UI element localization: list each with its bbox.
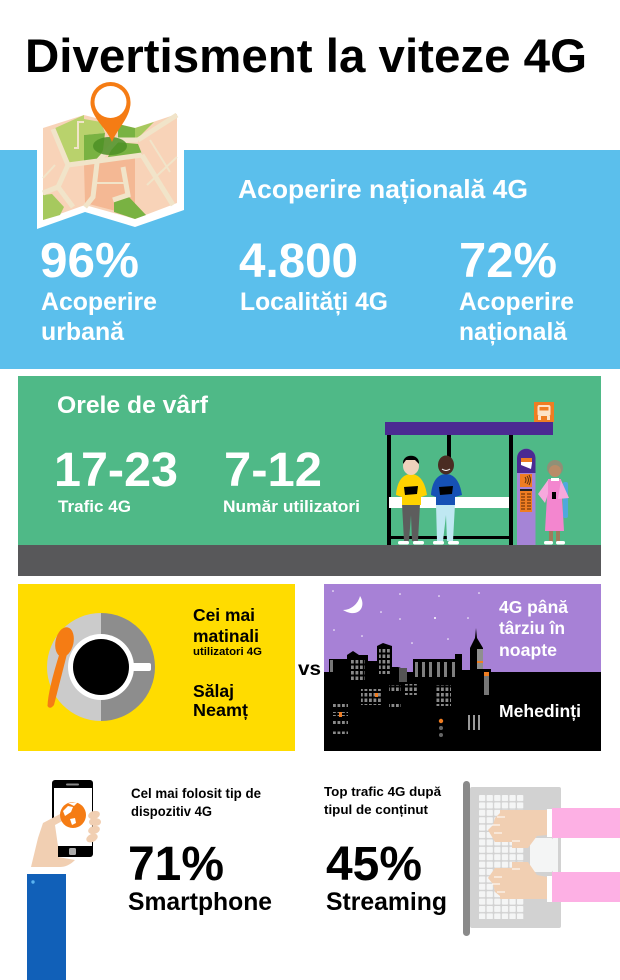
stat: urban coverage: Acoperire: [41, 289, 157, 316]
stat: 4G traffic: Trafic 4G: [58, 497, 131, 516]
stat: 4G localities: Localități 4G: [240, 289, 388, 316]
person: yellow shirt: [396, 456, 427, 544]
heading: Acoperire națională 4G: [238, 174, 528, 204]
stat: 4G localities: [239, 235, 388, 316]
icon: blue sleeve: [27, 874, 66, 980]
text: earliest users: matinali: [193, 626, 259, 646]
icon: moon and stars: [332, 590, 480, 644]
icon: hands on laptop: [463, 781, 620, 936]
stat: national coverage: [459, 234, 574, 346]
stat: 4G traffic: 17-23: [54, 443, 178, 497]
stat: content type: [324, 784, 447, 916]
text: late users: [499, 597, 581, 721]
stat: urban coverage: [40, 234, 157, 346]
text: earliest users: Neamț: [193, 700, 248, 720]
text: earliest users: Sălaj: [193, 681, 234, 701]
panel: national coverage: [0, 82, 620, 369]
person: blue shirt: [431, 456, 462, 544]
stat: users: Număr utilizatori: [223, 497, 360, 516]
panel: early users: [18, 584, 295, 751]
text: earliest users: utilizatori 4G: [193, 646, 262, 658]
icon: map with pin: [37, 82, 184, 229]
stat: 4G localities: 4.800: [239, 235, 358, 288]
stat: content type: Top trafic 4G după: [324, 784, 442, 799]
stat: content type: tipul de conținut: [324, 802, 429, 817]
stat: device type: [128, 786, 272, 916]
stat: urban coverage: urbană: [41, 319, 124, 346]
stat: national coverage: națională: [459, 319, 567, 346]
illustration: bus stop: [385, 402, 569, 545]
stat: content type: Streaming: [326, 889, 447, 916]
stat: content type: 45%: [326, 838, 422, 891]
stat: national coverage: 72%: [459, 234, 557, 288]
stat: device type: Smartphone: [128, 889, 272, 916]
text: late users: Mehedinți: [499, 701, 581, 721]
stat: users: [223, 443, 360, 516]
title: Divertisment la viteze 4G: [25, 30, 587, 83]
text: late users: târziu în: [499, 618, 565, 638]
stat: national coverage: Acoperire: [459, 289, 574, 316]
text: late users: 4G până: [499, 597, 568, 617]
panel: late night users: [324, 584, 601, 751]
icon: hand holding smartphone: [31, 780, 101, 867]
stat: device type: Cel mai folosit tip de: [131, 786, 261, 801]
person: woman in pink: [538, 460, 569, 544]
text: late users: noapte: [499, 640, 557, 660]
stat: device type: dispozitiv 4G: [131, 804, 212, 819]
city skyline: [329, 628, 491, 737]
text: earliest users: Cei mai: [193, 605, 255, 625]
icon: bus sign: [534, 402, 554, 422]
heading: Orele de vârf: [57, 392, 209, 419]
stat: users: 7-12: [224, 443, 322, 497]
vs label: vs: [298, 659, 321, 680]
stat: urban coverage: 96%: [40, 234, 139, 288]
stat: device type: 71%: [128, 838, 224, 891]
panel: peak hours: [18, 376, 601, 576]
text: earliest users: [193, 605, 262, 720]
ticket kiosk: [517, 449, 536, 545]
icon: coffee cup: [47, 613, 155, 721]
